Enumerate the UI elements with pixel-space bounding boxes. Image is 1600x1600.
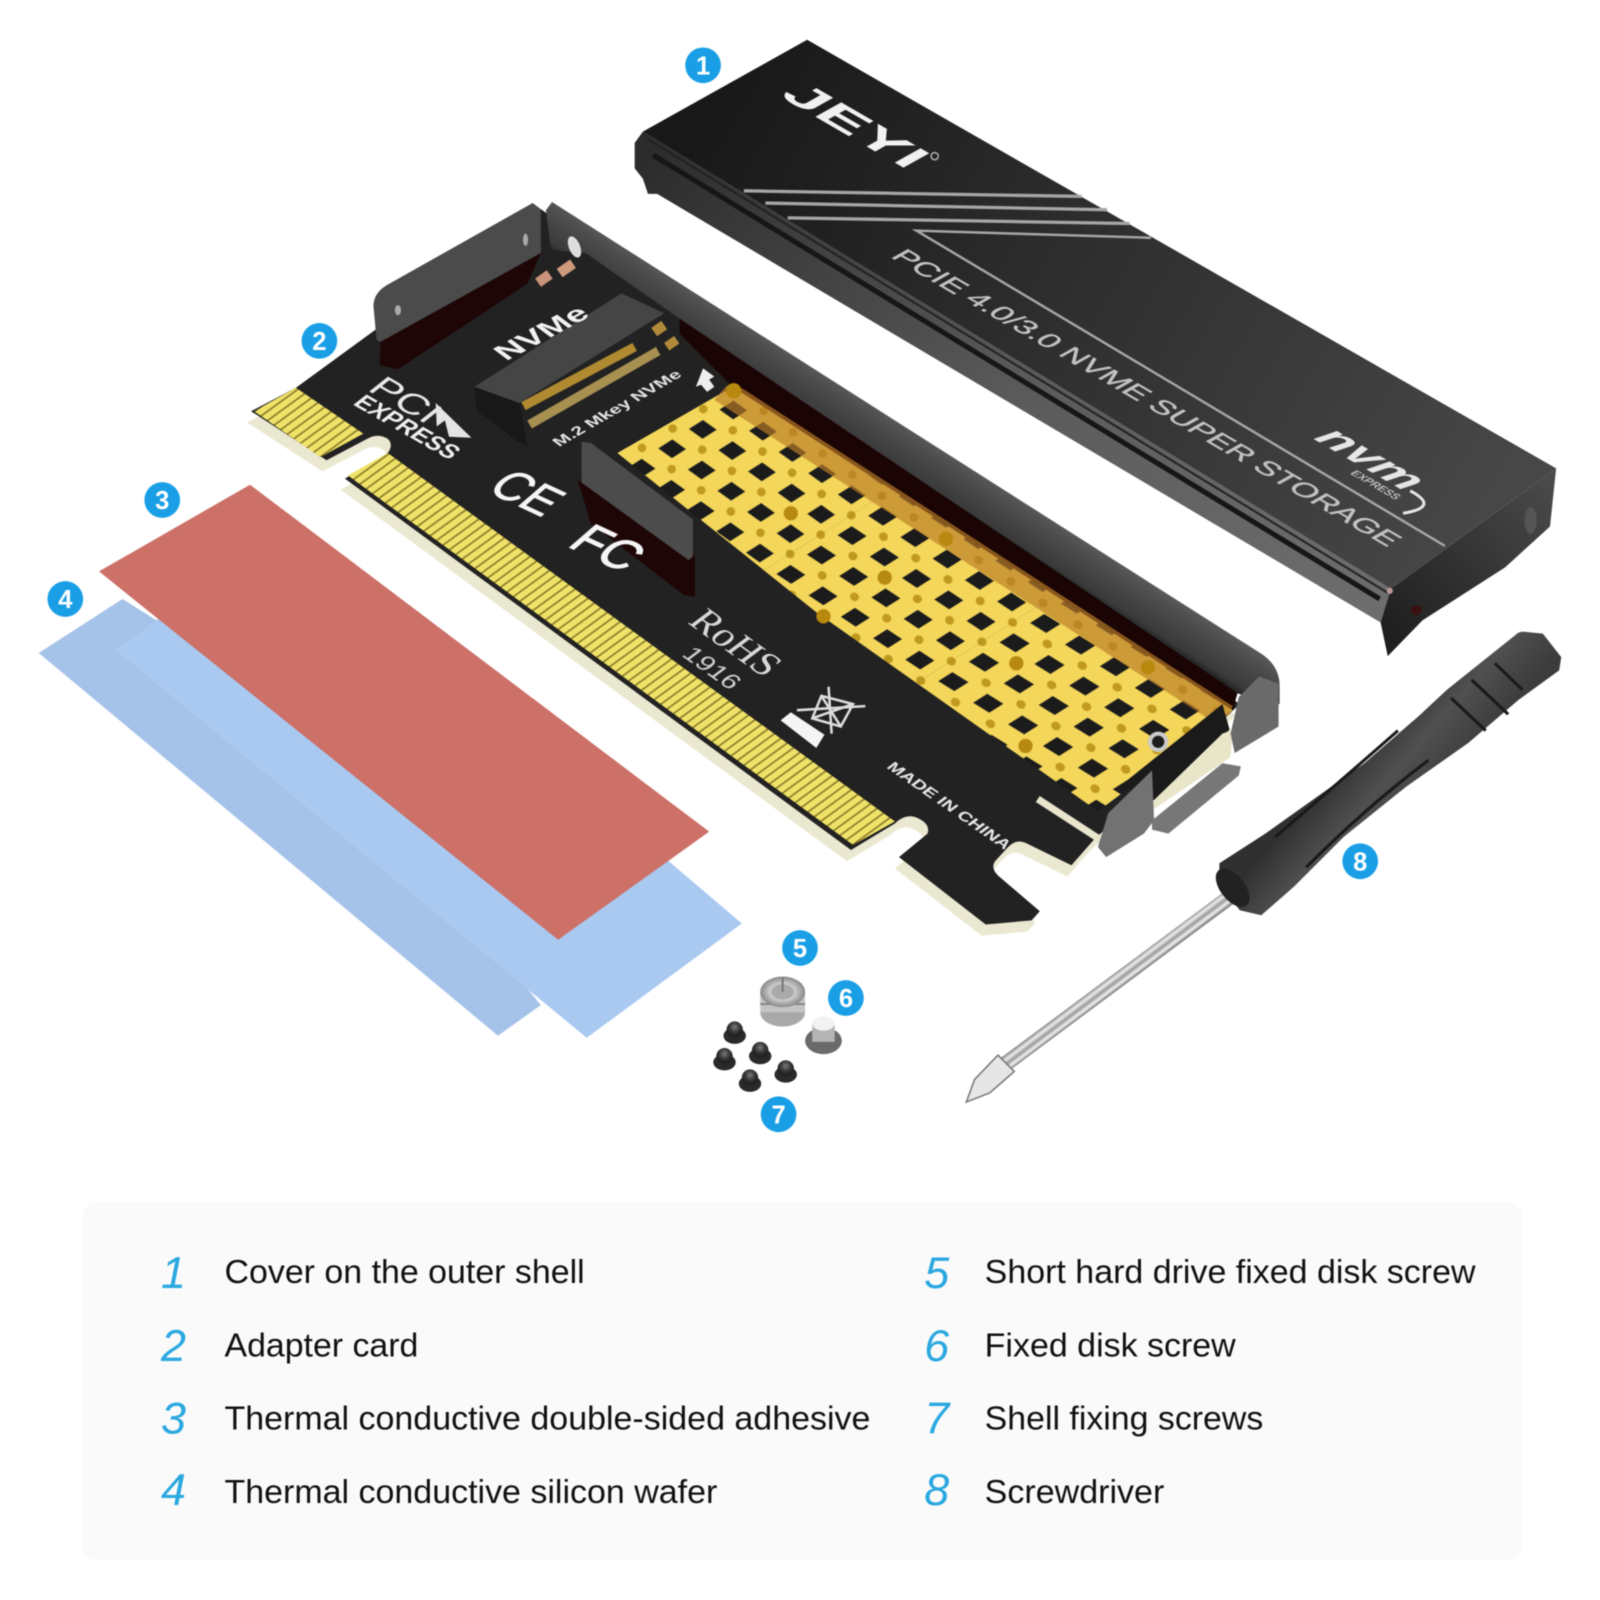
recycling bin icon bbox=[781, 687, 865, 748]
list labels: Short hard drive fixed disk screw bbox=[985, 1254, 1476, 1291]
left mounting tab bbox=[373, 203, 541, 369]
callout 8 bbox=[1342, 843, 1378, 879]
part 6: fixed disk screw bbox=[805, 1016, 842, 1054]
screwdriver shaft bbox=[1005, 898, 1229, 1064]
part 8: screwdriver bbox=[966, 632, 1561, 1102]
list numbers: 6 bbox=[924, 1320, 949, 1371]
part 4: thermal conductive silicon wafer bbox=[39, 531, 742, 1038]
callout 1 bbox=[685, 47, 721, 83]
RoHS mark: RoHS bbox=[680, 603, 791, 683]
cover end face bbox=[1381, 468, 1556, 656]
list numbers: 5 bbox=[924, 1247, 950, 1298]
arrow marking bbox=[696, 368, 714, 392]
callout 4: 4 bbox=[58, 586, 73, 614]
part 1: cover on the outer shell bbox=[635, 40, 1556, 656]
surface mount capacitors bbox=[535, 260, 576, 287]
part 7: shell fixing screws bbox=[713, 1021, 797, 1092]
FCC mark: FC bbox=[558, 516, 658, 580]
list numbers: 7 bbox=[924, 1393, 951, 1444]
callout 7: 7 bbox=[771, 1101, 786, 1129]
silicon wafer lower sheet bbox=[39, 599, 541, 1036]
callout 5: 5 bbox=[793, 935, 807, 963]
cover side face bbox=[635, 132, 1391, 622]
rail mounting hole bbox=[565, 234, 584, 259]
handle grip ridges bbox=[1276, 663, 1522, 867]
JEYI logo: JEYI bbox=[770, 77, 941, 175]
small bracket clip bbox=[578, 442, 695, 597]
silicon wafer upper sheet bbox=[115, 531, 742, 1038]
cover top face bbox=[643, 40, 1556, 589]
made in china label: MADE IN CHINA bbox=[883, 760, 1015, 852]
part 3: thermal conductive adhesive bbox=[99, 485, 709, 940]
list numbers: 2 bbox=[160, 1320, 186, 1371]
list numbers: 3 bbox=[161, 1393, 186, 1444]
M.2 connector bbox=[474, 293, 679, 447]
card board bbox=[251, 209, 1240, 924]
list labels: Adapter card bbox=[224, 1328, 418, 1365]
long gold finger section bbox=[348, 453, 895, 845]
cover stripes bbox=[744, 191, 1445, 546]
NVM Express logo bbox=[1305, 420, 1438, 513]
callout 7 bbox=[761, 1096, 796, 1132]
list labels: Screwdriver bbox=[985, 1474, 1164, 1511]
callout 5 bbox=[782, 930, 818, 966]
M.2 Mkey NVMe label: M.2 Mkey NVMe bbox=[549, 368, 686, 449]
parts list panel bbox=[82, 1202, 1522, 1560]
list numbers: 4 bbox=[161, 1464, 186, 1515]
list labels: Fixed disk screw bbox=[985, 1328, 1237, 1365]
callout 2 bbox=[302, 323, 337, 359]
part 5: short standoff screw bbox=[760, 977, 805, 1027]
NVM Express logo: nvm bbox=[1305, 420, 1438, 496]
shaded plate band bbox=[714, 386, 1233, 722]
list numbers: 8 bbox=[924, 1464, 949, 1515]
callout 3: 3 bbox=[155, 487, 169, 515]
PCI Express logo: EXPRESS bbox=[347, 391, 466, 464]
callout 6 bbox=[828, 980, 864, 1016]
list labels: Shell fixing screws bbox=[985, 1401, 1263, 1438]
numbered callouts bbox=[47, 47, 1378, 1132]
list labels: Cover on the outer shell bbox=[224, 1254, 585, 1291]
cover model text: PCIE 4.0/3.0 NVME SUPER STORAGE bbox=[884, 245, 1409, 550]
dark shadow band beside plate bbox=[680, 316, 1239, 710]
NVM Express logo: EXPRESS bbox=[1347, 469, 1404, 502]
part 2: adapter card bbox=[247, 202, 1280, 936]
callout 2: 2 bbox=[312, 328, 326, 356]
panel background bbox=[82, 1202, 1522, 1560]
registered mark bbox=[931, 153, 938, 160]
callout 3 bbox=[144, 482, 180, 518]
PCI Express logo: PCI bbox=[360, 371, 450, 429]
long side rail bbox=[546, 202, 1280, 704]
list numbers: 1 bbox=[161, 1247, 186, 1298]
large plate vias bbox=[726, 383, 1155, 753]
screwdriver handle bbox=[1219, 632, 1561, 915]
RoHS mark: 1916 bbox=[676, 642, 747, 694]
list numbers bbox=[160, 1247, 951, 1515]
card edge thickness bbox=[247, 220, 1236, 936]
callout 1: 1 bbox=[696, 52, 710, 80]
list labels bbox=[224, 1254, 1476, 1511]
screwdriver tip bbox=[966, 1055, 1014, 1102]
gold thermal plate bbox=[617, 382, 1233, 806]
CE mark: CE bbox=[477, 461, 577, 525]
callout 8: 8 bbox=[1353, 848, 1367, 876]
list labels: Thermal conductive double-sided adhesive bbox=[224, 1401, 870, 1438]
callout 6: 6 bbox=[839, 985, 853, 1013]
callout 4 bbox=[47, 581, 83, 617]
bracket end hardware bbox=[1038, 677, 1279, 857]
list labels: Thermal conductive silicon wafer bbox=[224, 1474, 717, 1511]
NVMe label: NVMe bbox=[486, 301, 596, 365]
short gold finger section bbox=[254, 388, 363, 457]
